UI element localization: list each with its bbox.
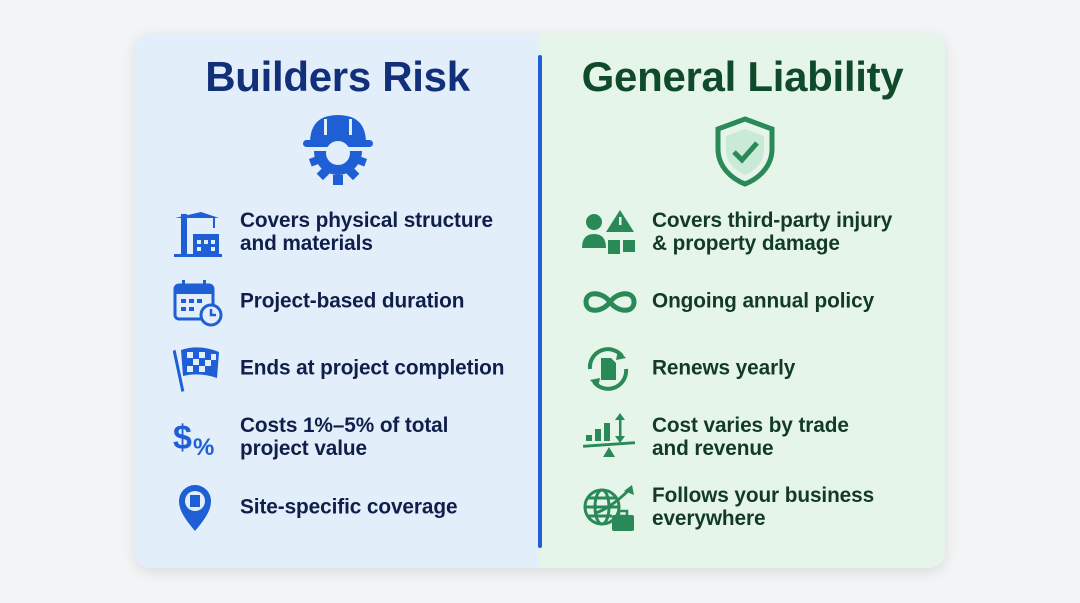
item: follows your business: Follows your business xyxy=(652,484,874,507)
item: renews yearly: Renews yearly xyxy=(652,356,795,380)
icon: crane xyxy=(174,212,222,257)
item: third-party injury: & property damage xyxy=(652,232,840,255)
panel: general liability xyxy=(540,33,945,568)
item: third-party injury: Covers third-party injury xyxy=(652,209,892,232)
icon: hard hat gear xyxy=(303,115,373,185)
icon: renew document xyxy=(588,347,628,391)
item: project-based duration: Project-based duration xyxy=(240,290,464,312)
icon: calendar clock xyxy=(174,280,222,326)
item: cost varies xyxy=(583,413,849,460)
item: project-based duration xyxy=(174,280,464,326)
icon: globe briefcase xyxy=(584,485,634,531)
icon: person warning xyxy=(582,210,635,254)
item: costs xyxy=(173,414,448,461)
item: costs: project value xyxy=(240,437,367,460)
heading: General Liability: General Liability xyxy=(582,53,903,100)
divider line xyxy=(538,55,542,548)
icon: scale chart xyxy=(583,413,636,457)
icon: dollar percent: % xyxy=(193,434,214,461)
item: third-party injury xyxy=(582,209,892,255)
item: ongoing annual policy: Ongoing annual policy xyxy=(652,290,874,312)
item: costs: Costs 1%–5% of total xyxy=(240,414,448,437)
item: covers physical structure xyxy=(174,209,493,257)
item: cost varies: Cost varies by trade xyxy=(652,414,849,437)
icon: shield check xyxy=(716,116,774,187)
icon: dollar percent: $ xyxy=(173,419,192,457)
icon: infinity xyxy=(584,291,636,313)
item: site-specific coverage: Site-specific coverage xyxy=(240,496,457,518)
item: follows your business: everywhere xyxy=(652,507,765,530)
panel: builders risk xyxy=(135,33,540,568)
item: covers physical structure: Covers physical structure xyxy=(240,209,493,232)
item: cost varies: and revenue xyxy=(652,437,773,460)
item: renews yearly xyxy=(588,347,796,391)
item: ends at project completion: Ends at project completion xyxy=(240,356,504,380)
card xyxy=(135,33,945,568)
heading: Builders Risk: Builders Risk xyxy=(205,53,470,100)
item: site-specific coverage xyxy=(179,485,457,531)
item: ends at project completion xyxy=(173,347,504,392)
icon: location pin xyxy=(179,485,211,531)
icon: checkered flag xyxy=(173,347,219,392)
item: follows your business xyxy=(584,484,874,531)
item: covers physical structure: and materials xyxy=(240,232,373,255)
icon: dollar percent xyxy=(173,419,214,461)
